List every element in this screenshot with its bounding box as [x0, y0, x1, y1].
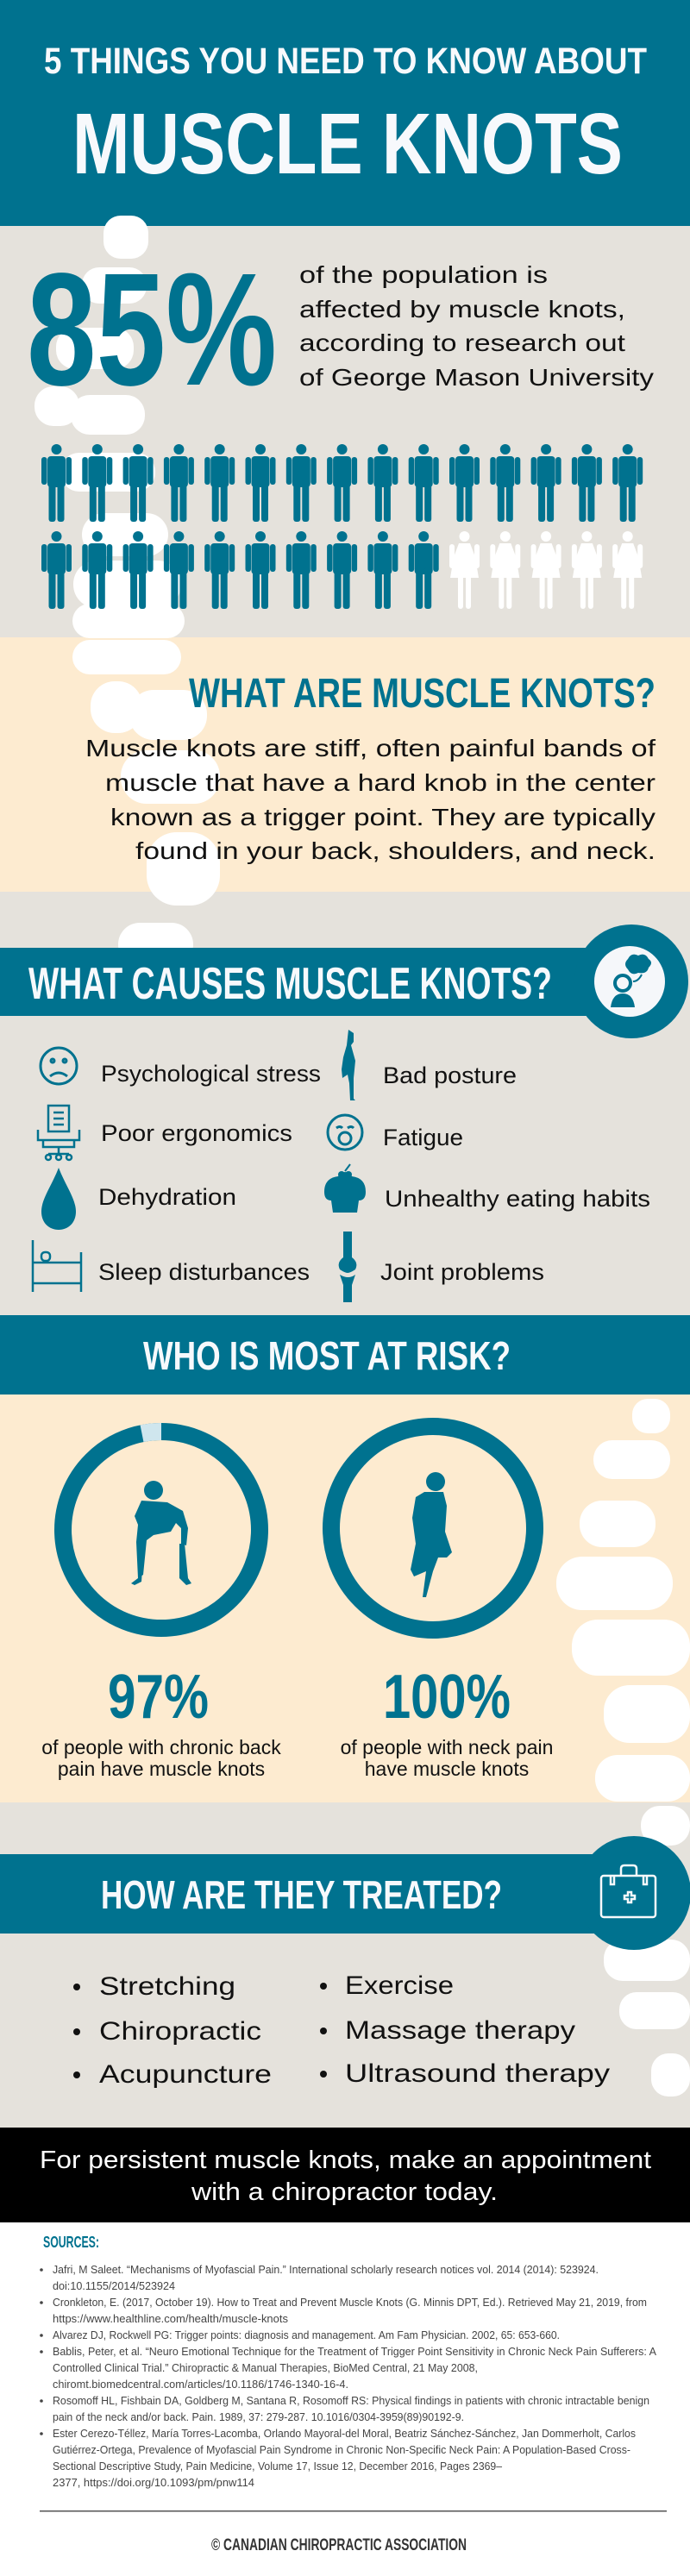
- sources list: Cronkleton, E. (2017, October 19). How to Treat and Prevent Muscle Knots (G. Minnis DPT, Ed.). Retrieved May 21, 2019, from: [53, 2297, 647, 2309]
- people pictogram: 85 of 100: [41, 444, 643, 609]
- definition text: known as a trigger point. They are typically: [110, 804, 656, 830]
- icon: sad face: [41, 1048, 77, 1084]
- banner: what causes muscle knots: [0, 924, 688, 1038]
- stat: 85%: [27, 241, 654, 419]
- causes list: Fatigue: [383, 1125, 463, 1150]
- causes list: Unhealthy eating habits: [385, 1186, 650, 1212]
- icon: cupcake: [324, 1164, 366, 1213]
- banner: who is most at risk: WHO IS MOST AT RISK?: [143, 1333, 511, 1378]
- icon: office chair: [38, 1106, 79, 1160]
- call to action banner: [0, 2128, 690, 2222]
- stat: 100%: [341, 1663, 553, 1780]
- causes list: Poor ergonomics: [101, 1120, 292, 1146]
- sources list: pain of the neck and/or back. Pain. 1989, 37: 279-287. 10.1016/0304-3959(89)90192-9.: [53, 2411, 464, 2423]
- sources list: Sectional Descriptive Study, Pain Medicine, Volume 17, Issue 12, December 2016, Pages 2369–: [53, 2460, 502, 2473]
- call to action banner: For persistent muscle knots, make an appointment: [40, 2147, 651, 2174]
- banner: how are they treated: HOW ARE THEY TREATED?: [101, 1872, 502, 1917]
- definition text: muscle that have a hard knob in the center: [105, 769, 656, 796]
- icon: bad posture: [342, 1030, 355, 1100]
- sources list: Alvarez DJ, Rockwell PG: Trigger points: diagnosis and management. Am Fam Physician. 2002, 65: 653-660.: [53, 2329, 560, 2341]
- ring chart: 100% neck pain: [331, 1426, 535, 1630]
- sources list: Jafri, M Saleet. “Mechanisms of Myofascial Pain.” International scholarly research notices vol. 2014 (2014): 523924.: [53, 2264, 599, 2276]
- stat: 97%: of people with chronic back: [41, 1736, 281, 1758]
- sources list: doi:10.1155/2014/523924: [53, 2280, 175, 2292]
- decorative spine blobs: [34, 216, 690, 2097]
- stat description: [299, 261, 654, 391]
- title: [44, 41, 647, 192]
- stat description: according to research out: [299, 329, 625, 356]
- sources list: Controlled Clinical Trial.” Chiropractic & Manual Therapies, BioMed Central, 21 May 2008,: [53, 2362, 478, 2374]
- causes list: Joint problems: [380, 1259, 544, 1285]
- sources list: Rosomoff HL, Fishbain DA, Goldberg M, Santana R, Rosomoff RS: Physical findings in patients with chronic intractable benign: [53, 2395, 649, 2407]
- ring chart: 97% back pain: [63, 1432, 260, 1628]
- icon: water drop: [41, 1168, 76, 1230]
- banner: how are they treated: [0, 1836, 690, 1950]
- treatments list: Ultrasound therapy: [345, 2059, 610, 2088]
- definition text: found in your back, shoulders, and neck.: [135, 837, 656, 864]
- causes list: Dehydration: [98, 1184, 236, 1210]
- treatments list: Chiropractic: [99, 2017, 261, 2046]
- sources list: Bablis, Peter, et al. “Neuro Emotional Technique for the Treatment of Trigger Point Sensitivity in Chronic Neck Pain Sufferers: A: [53, 2346, 657, 2358]
- sources list: chiromt.biomedcentral.com/articles/10.1186/1746-1340-16-4.: [53, 2379, 348, 2391]
- stat: 97%: pain have muscle knots: [58, 1758, 265, 1780]
- sources list: 2377, https://doi.org/10.1093/pm/pnw114: [53, 2477, 254, 2489]
- causes list: [33, 1030, 650, 1302]
- call to action banner: with a chiropractor today.: [191, 2178, 498, 2206]
- icon: hunched man: [131, 1481, 191, 1585]
- icon: joint: [339, 1232, 356, 1302]
- footer copyright: © CANADIAN CHIROPRACTIC ASSOCIATION: [211, 2536, 467, 2554]
- causes list: Bad posture: [383, 1062, 517, 1088]
- sources list: [40, 2264, 657, 2489]
- sources heading: SOURCES:: [43, 2234, 99, 2251]
- icon: medical bag: [601, 1865, 656, 1917]
- icon: woman holding neck: [411, 1472, 452, 1597]
- causes list: Psychological stress: [101, 1061, 321, 1087]
- treatments list: Massage therapy: [345, 2016, 575, 2045]
- stat: 100%: 100%: [383, 1663, 511, 1732]
- banner: who is most at risk: [0, 1315, 690, 1395]
- stat: 97%: 97%: [108, 1663, 209, 1732]
- treatments list: [73, 1971, 610, 2089]
- causes list: Sleep disturbances: [98, 1259, 310, 1285]
- stat: 100%: of people with neck pain: [341, 1736, 553, 1758]
- definition text: Muscle knots are stiff, often painful bands of: [85, 735, 656, 762]
- treatments list: Stretching: [99, 1972, 235, 2001]
- sources list: https://www.healthline.com/health/muscle-knots: [53, 2313, 288, 2325]
- treatments list: Acupuncture: [99, 2060, 272, 2089]
- stat description: of George Mason University: [299, 364, 654, 391]
- stat description: of the population is: [299, 261, 548, 288]
- icon: bed: [33, 1240, 81, 1292]
- definition text: [85, 735, 656, 864]
- icon: yawning face: [328, 1115, 362, 1150]
- stat: 97%: [41, 1663, 281, 1780]
- stat: 85%: 85%: [27, 241, 277, 419]
- treatments list: Exercise: [345, 1971, 454, 2000]
- stat: 100%: have muscle knots: [365, 1758, 529, 1780]
- sources list: Ester Cerezo-Téllez, María Torres-Lacomba, Orlando Mayoral-del Moral, Beatriz Sánchez-Sánchez, Jan Dommerholt, Carlos: [53, 2428, 636, 2440]
- sources list: Gutiérrez-Ortega, Prevalence of Myofascial Pain Syndrome in Chronic Non-Specific Neck Pain: A Population-Based Cross-: [53, 2444, 630, 2456]
- icon: person thinking: [594, 946, 665, 1017]
- stat description: affected by muscle knots,: [299, 296, 625, 323]
